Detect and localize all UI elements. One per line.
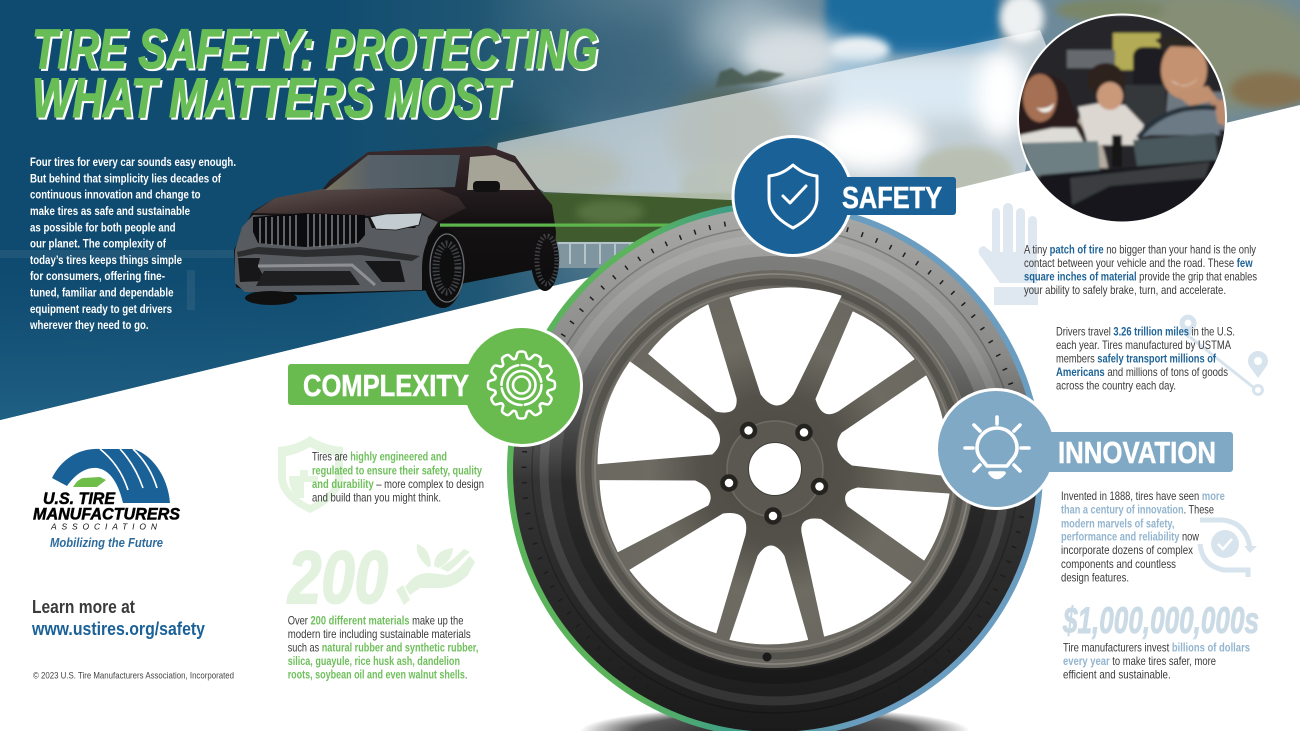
complexity paragraph: and durability – more complex to design <box>312 478 484 491</box>
badge: complexity <box>288 326 582 446</box>
icon: hand <box>979 203 1038 305</box>
innovation paragraph: modern marvels of safety, <box>1061 517 1174 530</box>
intro paragraph: tuned, familiar and dependable <box>30 286 174 300</box>
complexity paragraph: regulated to ensure their safety, quality <box>312 464 482 477</box>
hub <box>727 421 823 517</box>
innovation label bar <box>1030 432 1233 472</box>
sidewall bands <box>532 227 1018 713</box>
stat: 200 materials: 200 <box>286 536 388 619</box>
safety paragraph 1 <box>1024 244 1257 297</box>
innovation paragraph: incorporate dozens of complex <box>1061 544 1193 557</box>
learn more link: www.ustires.org/safety <box>31 619 205 639</box>
complexity word: COMPLEXITY <box>303 368 469 403</box>
intro paragraph <box>29 156 236 332</box>
front wheel <box>422 228 464 308</box>
safety paragraph 2: each year. Tires manufactured by USTMA <box>1056 339 1231 352</box>
family photo circle <box>1017 14 1235 230</box>
safety paragraph 2: Americans and millions of tons of goods <box>1056 366 1228 379</box>
icon: light bulb <box>965 417 1029 478</box>
green accent line <box>440 224 670 227</box>
lower intakes <box>238 258 266 282</box>
logo arch <box>52 449 170 503</box>
learn more link <box>31 597 205 639</box>
logo: ASSOCIATION <box>50 522 158 532</box>
innovation paragraph: performance and reliability now <box>1061 531 1199 544</box>
complexity paragraph: Tires are highly engineered and <box>312 451 447 464</box>
seat <box>1078 116 1108 168</box>
intro paragraph: equipment ready to get drivers <box>30 303 172 316</box>
tire body <box>513 208 1037 731</box>
windshield <box>325 155 460 190</box>
hood <box>252 189 466 222</box>
rear wheel <box>531 229 559 291</box>
rim <box>576 270 974 668</box>
learn more link: Learn more at <box>32 597 135 617</box>
icon: gear <box>488 352 555 418</box>
materials paragraph: Over 200 different materials make up the <box>288 614 463 627</box>
badge: safety <box>733 136 956 256</box>
woman <box>1019 75 1083 134</box>
icon: puzzle shield <box>278 436 343 513</box>
badge: innovation <box>936 390 1233 508</box>
safety paragraph 2: across the country each day. <box>1056 380 1176 393</box>
lug holes <box>722 424 826 522</box>
mirror <box>473 181 500 192</box>
investment paragraph: efficient and sustainable. <box>1063 669 1171 682</box>
intro paragraph: But behind that simplicity lies decades of <box>30 172 221 185</box>
innovation word: INNOVATION <box>1058 435 1216 470</box>
icon: shield check <box>769 165 817 228</box>
title: WHAT MATTERS MOST <box>32 66 512 129</box>
materials paragraph <box>288 614 478 682</box>
side window <box>467 155 535 190</box>
tire and wheel <box>507 202 1043 731</box>
complexity circle <box>462 326 582 446</box>
car <box>234 146 559 308</box>
icon: route pins <box>1179 315 1268 394</box>
intro paragraph: as possible for both people and <box>30 221 176 234</box>
materials paragraph: modern tire including sustainable materials <box>288 628 471 641</box>
lower dark band <box>237 247 420 261</box>
grille <box>253 213 365 247</box>
grille bars <box>260 214 356 247</box>
tire shadow <box>580 707 970 731</box>
intro paragraph: for consumers, offering fine- <box>30 270 165 283</box>
man <box>1165 92 1235 130</box>
copyright: © 2023 U.S. Tire Manufacturers Association, Incorporated <box>33 670 234 682</box>
steering wheel <box>1138 108 1220 138</box>
translucent white wedge over photo <box>495 30 1048 201</box>
headlight <box>370 213 422 230</box>
icon: circular check <box>1200 520 1257 577</box>
car roof and body <box>234 146 556 295</box>
front ground tire <box>245 291 297 305</box>
spoke disc <box>599 293 951 645</box>
innovation paragraph: design features. <box>1061 571 1129 584</box>
investment paragraph: Tire manufacturers invest billions of dollars <box>1063 642 1250 655</box>
safety paragraph 1: square inches of material provide the grip that enables <box>1024 271 1257 284</box>
logo tagline: Mobilizing the Future <box>50 536 163 550</box>
safety paragraph 2: members safely transport millions of <box>1056 353 1216 366</box>
rear rim <box>537 236 557 284</box>
complexity label bar <box>288 364 488 405</box>
safety paragraph 1: your ability to safely brake, turn, and accelerate. <box>1024 284 1226 297</box>
materials paragraph: roots, soybean oil and even walnut shells. <box>288 669 467 682</box>
icon: hand with leaves <box>396 544 475 605</box>
title <box>32 17 598 129</box>
front bumper <box>235 215 438 292</box>
logo <box>33 449 180 550</box>
girl <box>1078 103 1144 145</box>
innovation paragraph <box>1061 490 1225 584</box>
innovation paragraph: Invented in 1888, tires have seen more <box>1061 490 1225 503</box>
investment paragraph: every year to make tires safer, more <box>1063 655 1216 668</box>
safety paragraph 1: A tiny patch of tire no bigger than your hand is the only <box>1024 244 1256 256</box>
complexity paragraph <box>312 451 484 504</box>
safety word: SAFETY <box>842 180 942 215</box>
innovation paragraph: than a century of innovation. These <box>1061 503 1214 516</box>
investment paragraph <box>1063 642 1250 682</box>
safety paragraph 2: Drivers travel 3.26 trillion miles in the U.S. <box>1056 326 1235 339</box>
outer coloured ring <box>507 202 1043 731</box>
valve stem <box>762 652 772 662</box>
safety paragraph 1: contact between your vehicle and the road. These few <box>1024 257 1253 270</box>
safety circle <box>733 136 852 256</box>
intro paragraph: make tires as safe and sustainable <box>30 205 190 218</box>
wheel windows <box>598 288 949 644</box>
materials paragraph: silica, guayule, rice husk ash, dandelion <box>288 655 460 668</box>
materials paragraph: such as natural rubber and synthetic rubber, <box>288 642 478 655</box>
intro paragraph: Four tires for every car sounds easy enough. <box>30 156 236 169</box>
intro paragraph: wherever they need to go. <box>29 319 148 332</box>
innovation circle <box>936 390 1056 508</box>
complexity paragraph: and build than you might think. <box>312 491 441 504</box>
innovation paragraph: components and countless <box>1061 558 1176 571</box>
tread ticks <box>524 219 1026 721</box>
background photo: sky, trees and road <box>0 0 1300 420</box>
safety label bar <box>815 177 956 215</box>
intro paragraph: today’s tires keeps things simple <box>30 254 182 267</box>
intro paragraph: continuous innovation and change to <box>30 189 200 202</box>
intro paragraph: our planet. The complexity of <box>30 238 166 251</box>
centre bore <box>748 442 802 496</box>
dashboard panels <box>1022 141 1100 182</box>
safety paragraph 2 <box>1056 326 1235 393</box>
guard rail <box>0 243 640 310</box>
logo: MANUFACTURERS <box>33 506 180 524</box>
front rim <box>430 234 464 302</box>
logo wordmark: U.S. TIRE <box>43 490 116 508</box>
title: TIRE SAFETY: PROTECTING <box>32 17 598 80</box>
